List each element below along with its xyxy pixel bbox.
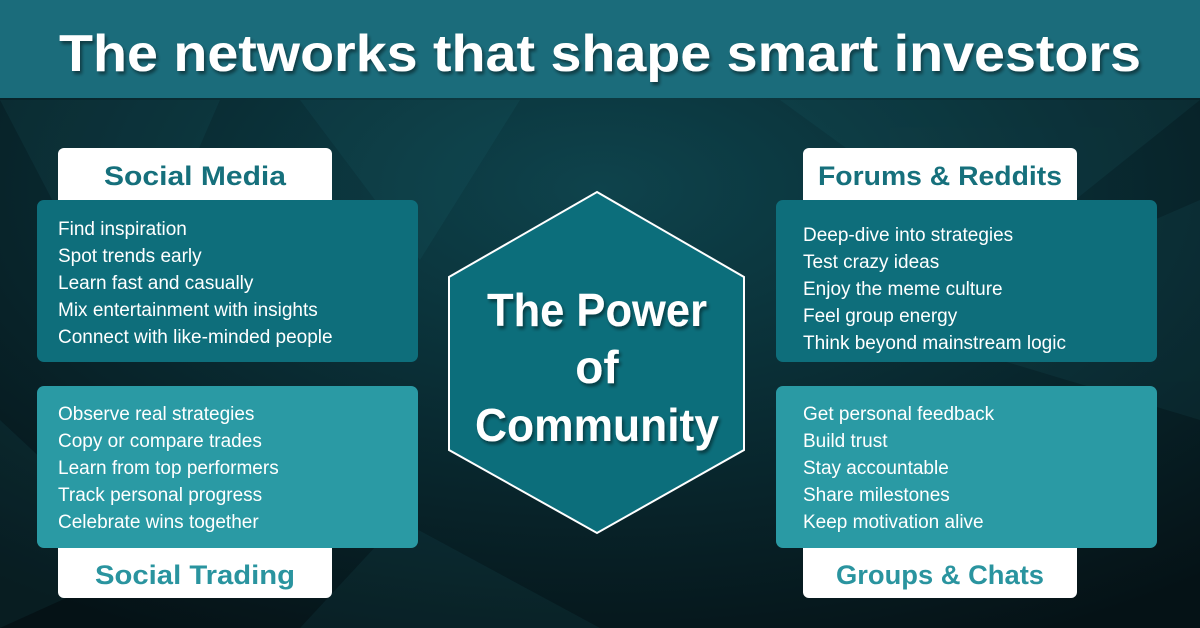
list: groups: Build trust	[803, 431, 888, 452]
list: forums	[776, 200, 1157, 362]
list: social media	[37, 200, 418, 362]
heading: Groups & Chats: Groups & Chats	[836, 560, 1044, 590]
heading: Social Media	[58, 148, 332, 208]
list: social media: Mix entertainment with insights	[58, 300, 318, 321]
heading: Groups & Chats	[803, 540, 1077, 598]
hexagon: The Power of Community	[449, 192, 744, 533]
list: social trading: Learn from top performers	[58, 458, 279, 479]
list: social trading: Observe real strategies	[58, 404, 254, 425]
list: groups: Keep motivation alive	[803, 512, 984, 533]
list: social trading: Celebrate wins together	[58, 512, 259, 533]
list: groups: Stay accountable	[803, 458, 949, 479]
heading: Social Media: Social Media	[104, 161, 287, 191]
list: groups	[776, 386, 1157, 548]
list: social media: Find inspiration	[58, 219, 187, 240]
panel: social trading	[37, 386, 418, 598]
heading: Forums & Reddits	[803, 148, 1077, 208]
hexagon: The Power of Community: The Power	[487, 284, 707, 336]
list: forums: Think beyond mainstream logic	[803, 333, 1066, 354]
panel: groups & chats	[776, 386, 1157, 598]
heading: Forums & Reddits: Forums & Reddits	[818, 161, 1062, 191]
list: social trading: Track personal progress	[58, 485, 262, 506]
list: social trading	[37, 386, 418, 548]
hexagon: The Power of Community: of	[575, 341, 619, 393]
list: social media: Learn fast and casually	[58, 273, 254, 294]
hexagon: The Power of Community: Community	[475, 399, 719, 451]
list: social trading: Copy or compare trades	[58, 431, 262, 452]
panel: forums & reddits	[776, 148, 1157, 362]
list: social media: Connect with like-minded people	[58, 327, 333, 348]
list: forums: Enjoy the meme culture	[803, 279, 1003, 300]
title: The networks that shape smart investors	[59, 25, 1141, 83]
heading: Social Trading	[58, 540, 332, 598]
list: groups: Get personal feedback	[803, 404, 995, 425]
heading: Social Trading: Social Trading	[95, 560, 295, 590]
title banner	[0, 0, 1200, 98]
list: social media: Spot trends early	[58, 246, 202, 267]
list: forums: Feel group energy	[803, 306, 958, 327]
list: groups: Share milestones	[803, 485, 950, 506]
list: forums: Deep-dive into strategies	[803, 225, 1013, 246]
panel: social media	[37, 148, 418, 362]
list: forums: Test crazy ideas	[803, 252, 939, 273]
